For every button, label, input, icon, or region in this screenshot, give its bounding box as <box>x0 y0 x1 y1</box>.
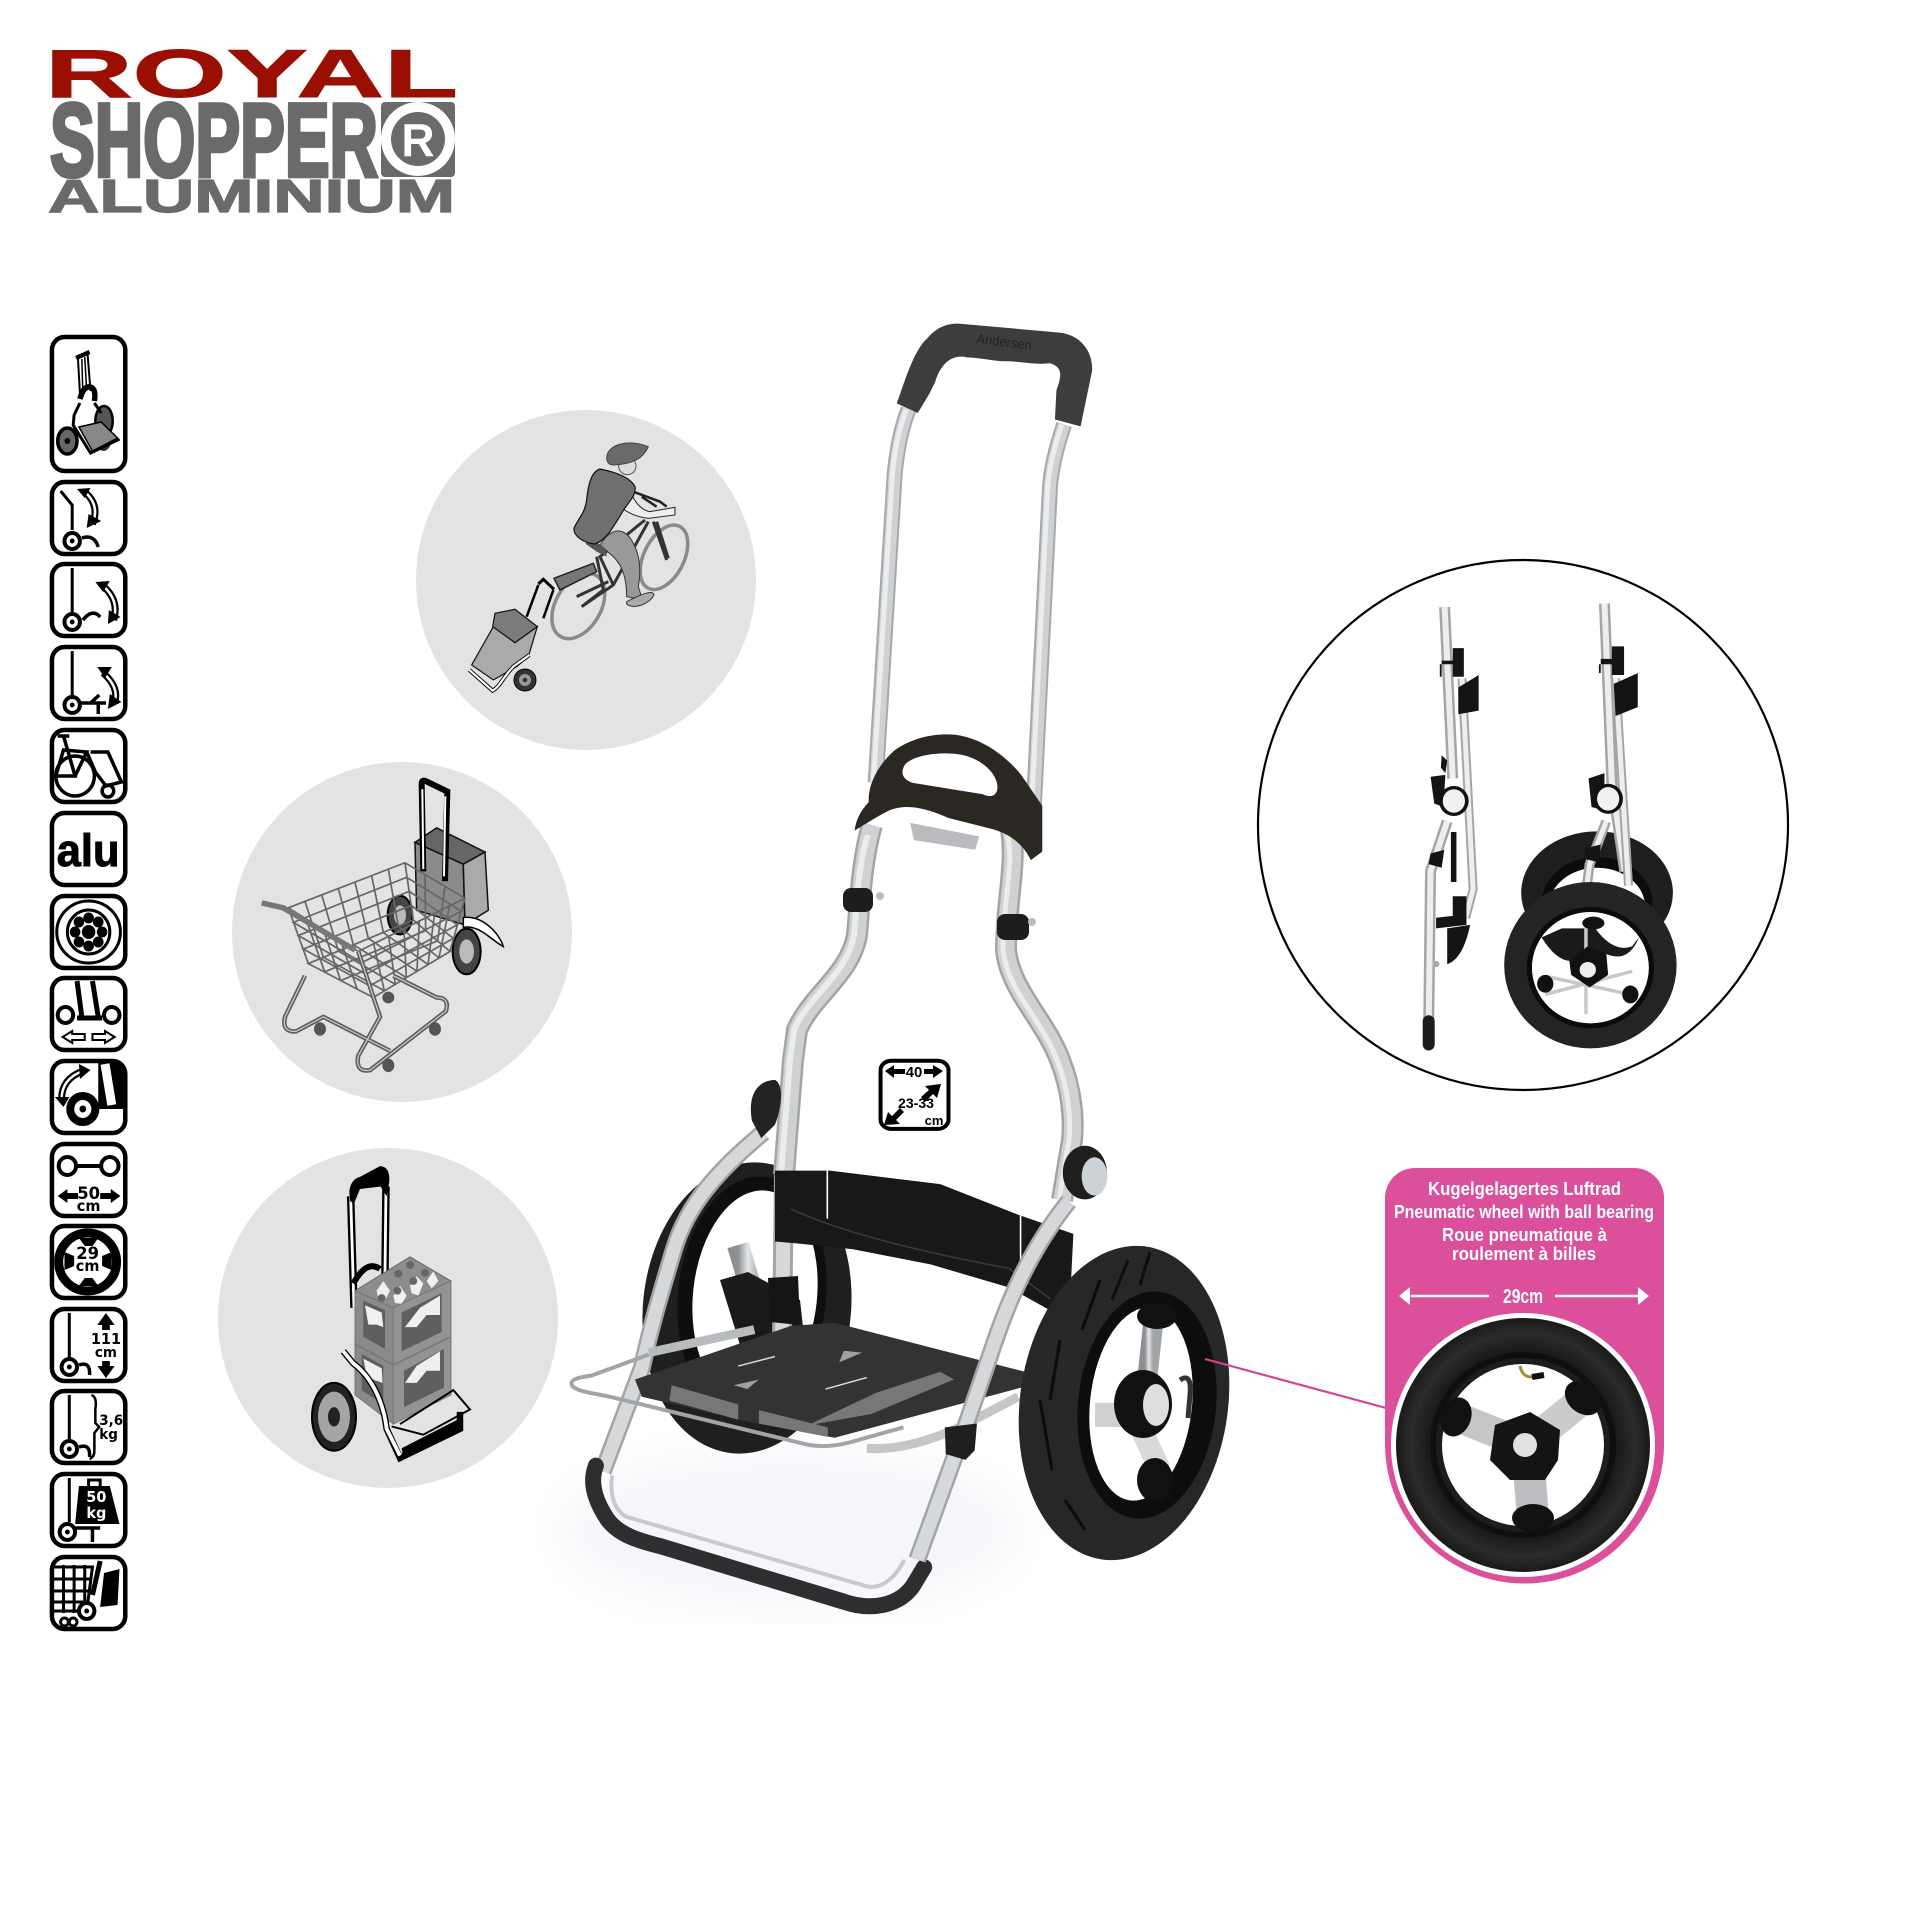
icon: bicycle towing <box>52 730 125 802</box>
icon: foldable footplate <box>52 564 125 636</box>
icon: aluminium <box>52 813 125 885</box>
wire footplate frame <box>571 1355 904 1446</box>
folded rear wheel <box>1521 831 1673 954</box>
front wheel <box>999 1232 1249 1574</box>
icon: width 50 cm <box>52 1144 125 1216</box>
logo word SHOPPER: SHOPPER <box>50 83 378 199</box>
icon: load 50 kg: kg <box>86 1505 106 1522</box>
spokes <box>1095 1325 1160 1470</box>
feature icon column <box>52 337 125 1629</box>
logo word ALUMINIUM: ALUMINIUM <box>48 170 455 222</box>
icon: load 50 kg <box>52 1474 125 1546</box>
icon: weight 3.6 kg: kg <box>99 1427 118 1443</box>
back plate <box>775 1171 1073 1311</box>
right fold knob <box>1063 1146 1107 1199</box>
icon: folding support <box>52 647 125 719</box>
icon: wheel 29 cm: 29 <box>76 1243 99 1263</box>
icon: wheel 29 cm <box>52 1226 125 1298</box>
lower frame tubes <box>781 825 1073 1340</box>
callout text: Kugelgelagertes Luftrad <box>1428 1178 1621 1199</box>
left fold knob <box>751 1080 781 1138</box>
logo registered mark: R <box>401 114 435 166</box>
panel: carrying bottle crates <box>218 1148 558 1488</box>
dimension arrows 29 cm <box>1399 1286 1649 1308</box>
panel: folded trolley views <box>1258 560 1788 1090</box>
icon: wheel track width <box>52 978 125 1050</box>
leader line to wheel detail <box>1205 1359 1386 1408</box>
icon: height 111 cm <box>52 1309 125 1381</box>
icon: weight 3.6 kg: 3,6 <box>99 1413 123 1429</box>
icon: wheel 29 cm: cm <box>76 1258 99 1275</box>
frame bracket <box>945 1424 977 1460</box>
dimension icon labels: 40 <box>906 1064 922 1081</box>
left front frame tube <box>603 1132 763 1471</box>
callout text: roulement à billes <box>1452 1243 1596 1264</box>
base foot bar <box>593 1466 924 1606</box>
icon: trolley <box>52 337 125 471</box>
wheel detail photo <box>1391 1313 1655 1577</box>
rear wheel <box>628 1152 866 1464</box>
icon: ball bearing wheel <box>52 896 125 968</box>
folded front wheel <box>1504 882 1677 1048</box>
callout text <box>1394 1178 1654 1264</box>
illustration: trolley in shopping cart <box>262 781 503 1072</box>
panel: fits in shopping cart <box>232 762 572 1102</box>
logo: Royal Shopper Aluminium <box>45 36 458 222</box>
illustration: trolley loaded with crates <box>312 1166 470 1458</box>
callout text: Pneumatic wheel with ball bearing <box>1394 1201 1654 1222</box>
spokes <box>1457 1400 1582 1517</box>
photo: folded side views <box>1429 604 1677 1048</box>
wire frame back rod <box>649 1330 754 1353</box>
icon: shopping cart fit <box>52 1557 125 1629</box>
panel: cycling with trolley <box>416 410 756 750</box>
callout: pneumatic wheel <box>1385 1168 1664 1584</box>
upper handle section <box>855 324 1092 860</box>
height clamps <box>843 888 1036 940</box>
icon: width 50 cm: 50 <box>77 1183 100 1203</box>
illustration: cyclist towing trolley <box>469 443 698 691</box>
icon: height 111 cm: cm <box>95 1345 117 1361</box>
main photo: trolley frame <box>560 324 1386 1610</box>
icon: weight 3.6 kg <box>52 1391 125 1463</box>
dimension icon labels <box>884 1064 943 1128</box>
lower support tube <box>867 1397 1018 1449</box>
lower section <box>571 1061 1107 1606</box>
callout text: Roue pneumatique à <box>1442 1224 1608 1245</box>
dimension icon labels: cm <box>925 1113 943 1128</box>
rear axle clamp <box>768 1276 800 1325</box>
icon: telescopic handle <box>52 482 125 554</box>
valve <box>1520 1366 1542 1377</box>
dimension icon: 40 x 23-33 cm <box>881 1061 948 1129</box>
logo registered mark <box>381 102 455 177</box>
right front frame tube <box>917 1201 1069 1560</box>
middle carry handle <box>855 734 1042 860</box>
roller <box>910 823 979 850</box>
icon: height 111 cm: 111 <box>91 1331 121 1348</box>
icon: wheel swivel <box>52 1061 125 1133</box>
logo word ROYAL: ROYAL <box>45 36 458 112</box>
icon: aluminium: alu <box>57 826 119 876</box>
footplate mesh <box>635 1323 1025 1438</box>
icon: width 50 cm: cm <box>77 1198 100 1215</box>
icon: load 50 kg: 50 <box>86 1489 106 1506</box>
floor shadow <box>560 1450 1020 1610</box>
dimension arrows 29 cm: 29cm <box>1503 1286 1543 1308</box>
top grip: Andersen <box>976 331 1033 353</box>
top grip <box>897 324 1092 426</box>
dimension icon labels: 23-33 <box>898 1095 934 1111</box>
